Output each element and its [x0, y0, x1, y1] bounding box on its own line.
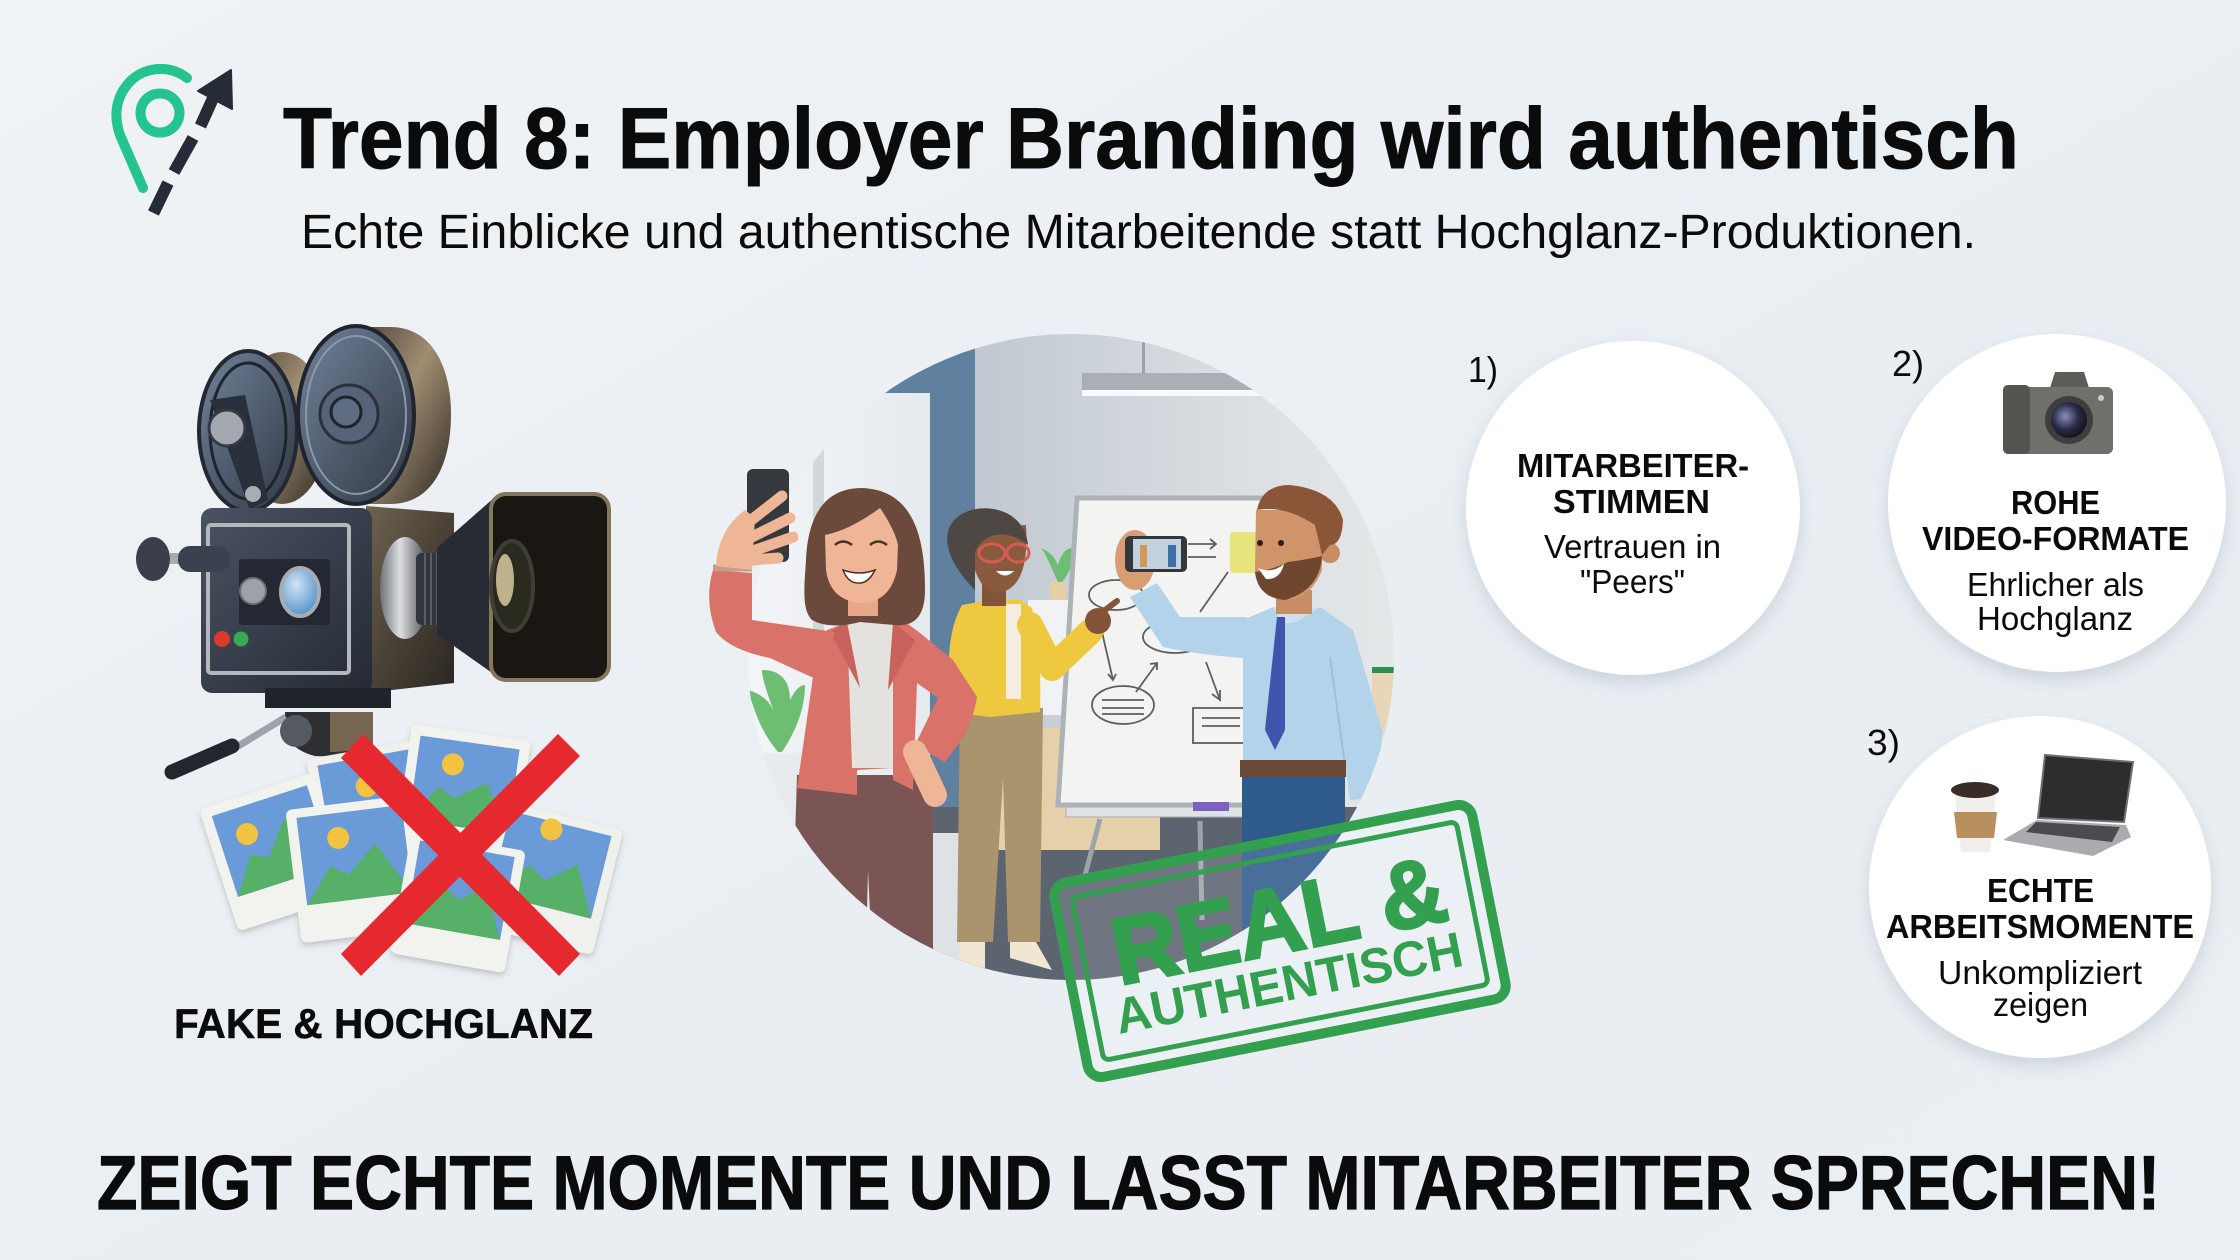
panel: fake and glossy — [136, 326, 623, 1047]
photo: top center — [393, 724, 531, 876]
card 3 text — [1938, 954, 2142, 1023]
card 3 text: zeigen — [1993, 986, 2088, 1023]
man's raised arm and phone — [1115, 530, 1247, 658]
card 2 text — [1967, 566, 2144, 637]
icon: red cross — [341, 734, 580, 976]
stamp: real and authentic — [1052, 803, 1508, 1079]
card 1 heading: STIMMEN — [1553, 483, 1710, 520]
card 1 text: "Peers" — [1580, 563, 1685, 600]
label: fake and glossy: FAKE & HOCHGLANZ — [174, 1000, 593, 1047]
office background — [740, 330, 1400, 1000]
woman's raised arm with phone — [709, 469, 835, 680]
card 2 text: Hochglanz — [1977, 600, 2133, 637]
photo: back small — [306, 739, 447, 889]
number 1: 1) — [1468, 349, 1498, 390]
stamp: real and authentic: AUTHENTISCH — [1110, 921, 1467, 1045]
card 1 heading — [1517, 447, 1749, 520]
icon: photo camera — [2003, 372, 2113, 454]
icon: film camera — [136, 326, 609, 772]
photo: middle left — [285, 795, 427, 943]
card 3 heading: ECHTE — [1987, 872, 2094, 909]
person: man in blue shirt body — [1240, 485, 1383, 931]
stamp: real and authentic: REAL & — [1103, 836, 1455, 1005]
card 1 heading: MITARBEITER- — [1517, 447, 1749, 484]
card 1 text: Vertrauen in — [1544, 528, 1721, 565]
panel: real office selfie scene — [709, 330, 1508, 1079]
whiteboard — [1058, 498, 1300, 920]
office plant — [748, 670, 805, 752]
number 2: 2) — [1892, 343, 1924, 384]
card 3: Echte Arbeitsmomente — [1867, 716, 2211, 1058]
icon: location pin with dashed arrow — [116, 69, 232, 213]
card 3 heading — [1886, 872, 2194, 945]
title: Trend 8: Employer Branding wird authentisch — [283, 91, 2019, 187]
photo: front center — [390, 831, 526, 973]
person: woman in coral blazer body — [795, 488, 977, 949]
card 3 heading: ARBEITSMOMENTE — [1886, 908, 2194, 945]
card 2: Rohe Video-Formate — [1888, 334, 2226, 672]
icon: laptop — [2003, 755, 2133, 856]
card 2 heading — [1922, 484, 2189, 557]
card 1 text — [1544, 528, 1721, 600]
person: woman in yellow — [947, 508, 1117, 975]
photo: right — [472, 801, 623, 955]
photo: left — [199, 773, 353, 931]
subtitle: Echte Einblicke und authentische Mitarbeitende statt Hochglanz-Produktionen. — [301, 206, 1976, 259]
card 1: Mitarbeiter-Stimmen — [1466, 341, 1800, 675]
card 2 heading: ROHE — [2011, 484, 2100, 521]
photo stack — [199, 724, 623, 973]
card 2 text: Ehrlicher als — [1967, 566, 2144, 603]
icon: coffee cup — [1951, 782, 1999, 852]
card 2 heading: VIDEO-FORMATE — [1922, 520, 2189, 557]
card 3 text: Unkompliziert — [1938, 954, 2142, 991]
number 3: 3) — [1867, 722, 1900, 763]
